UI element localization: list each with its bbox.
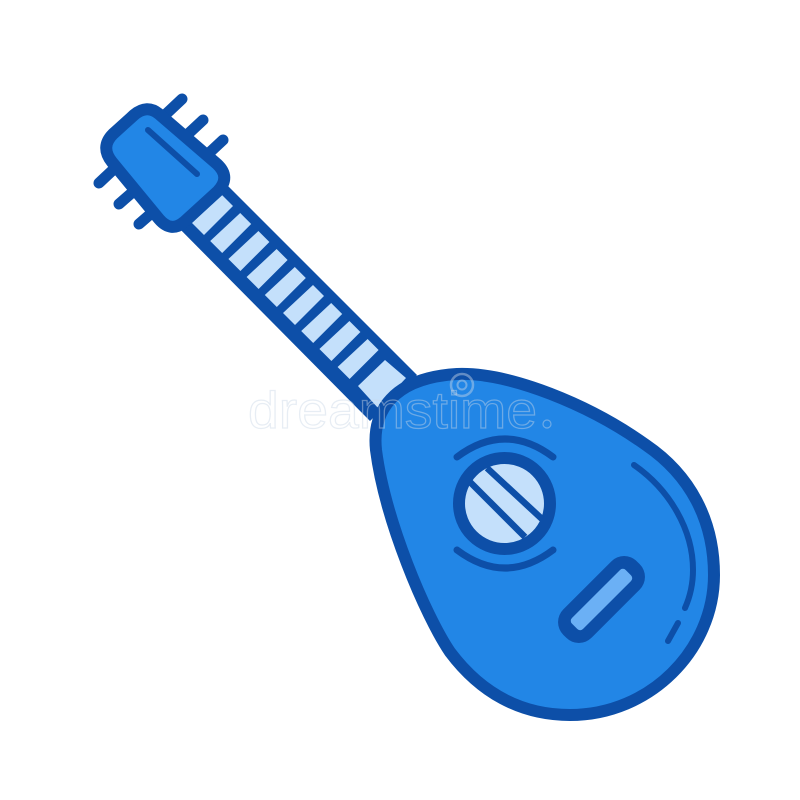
bridge (551, 549, 652, 650)
body highlights (634, 465, 693, 641)
sound hole (459, 458, 550, 549)
watermark: dreamstime (248, 382, 537, 440)
sound hole arcs (457, 439, 553, 568)
neck (167, 170, 417, 421)
body (376, 374, 714, 715)
frets (192, 195, 406, 408)
tuning pegs (99, 99, 223, 224)
headstock (106, 109, 224, 227)
